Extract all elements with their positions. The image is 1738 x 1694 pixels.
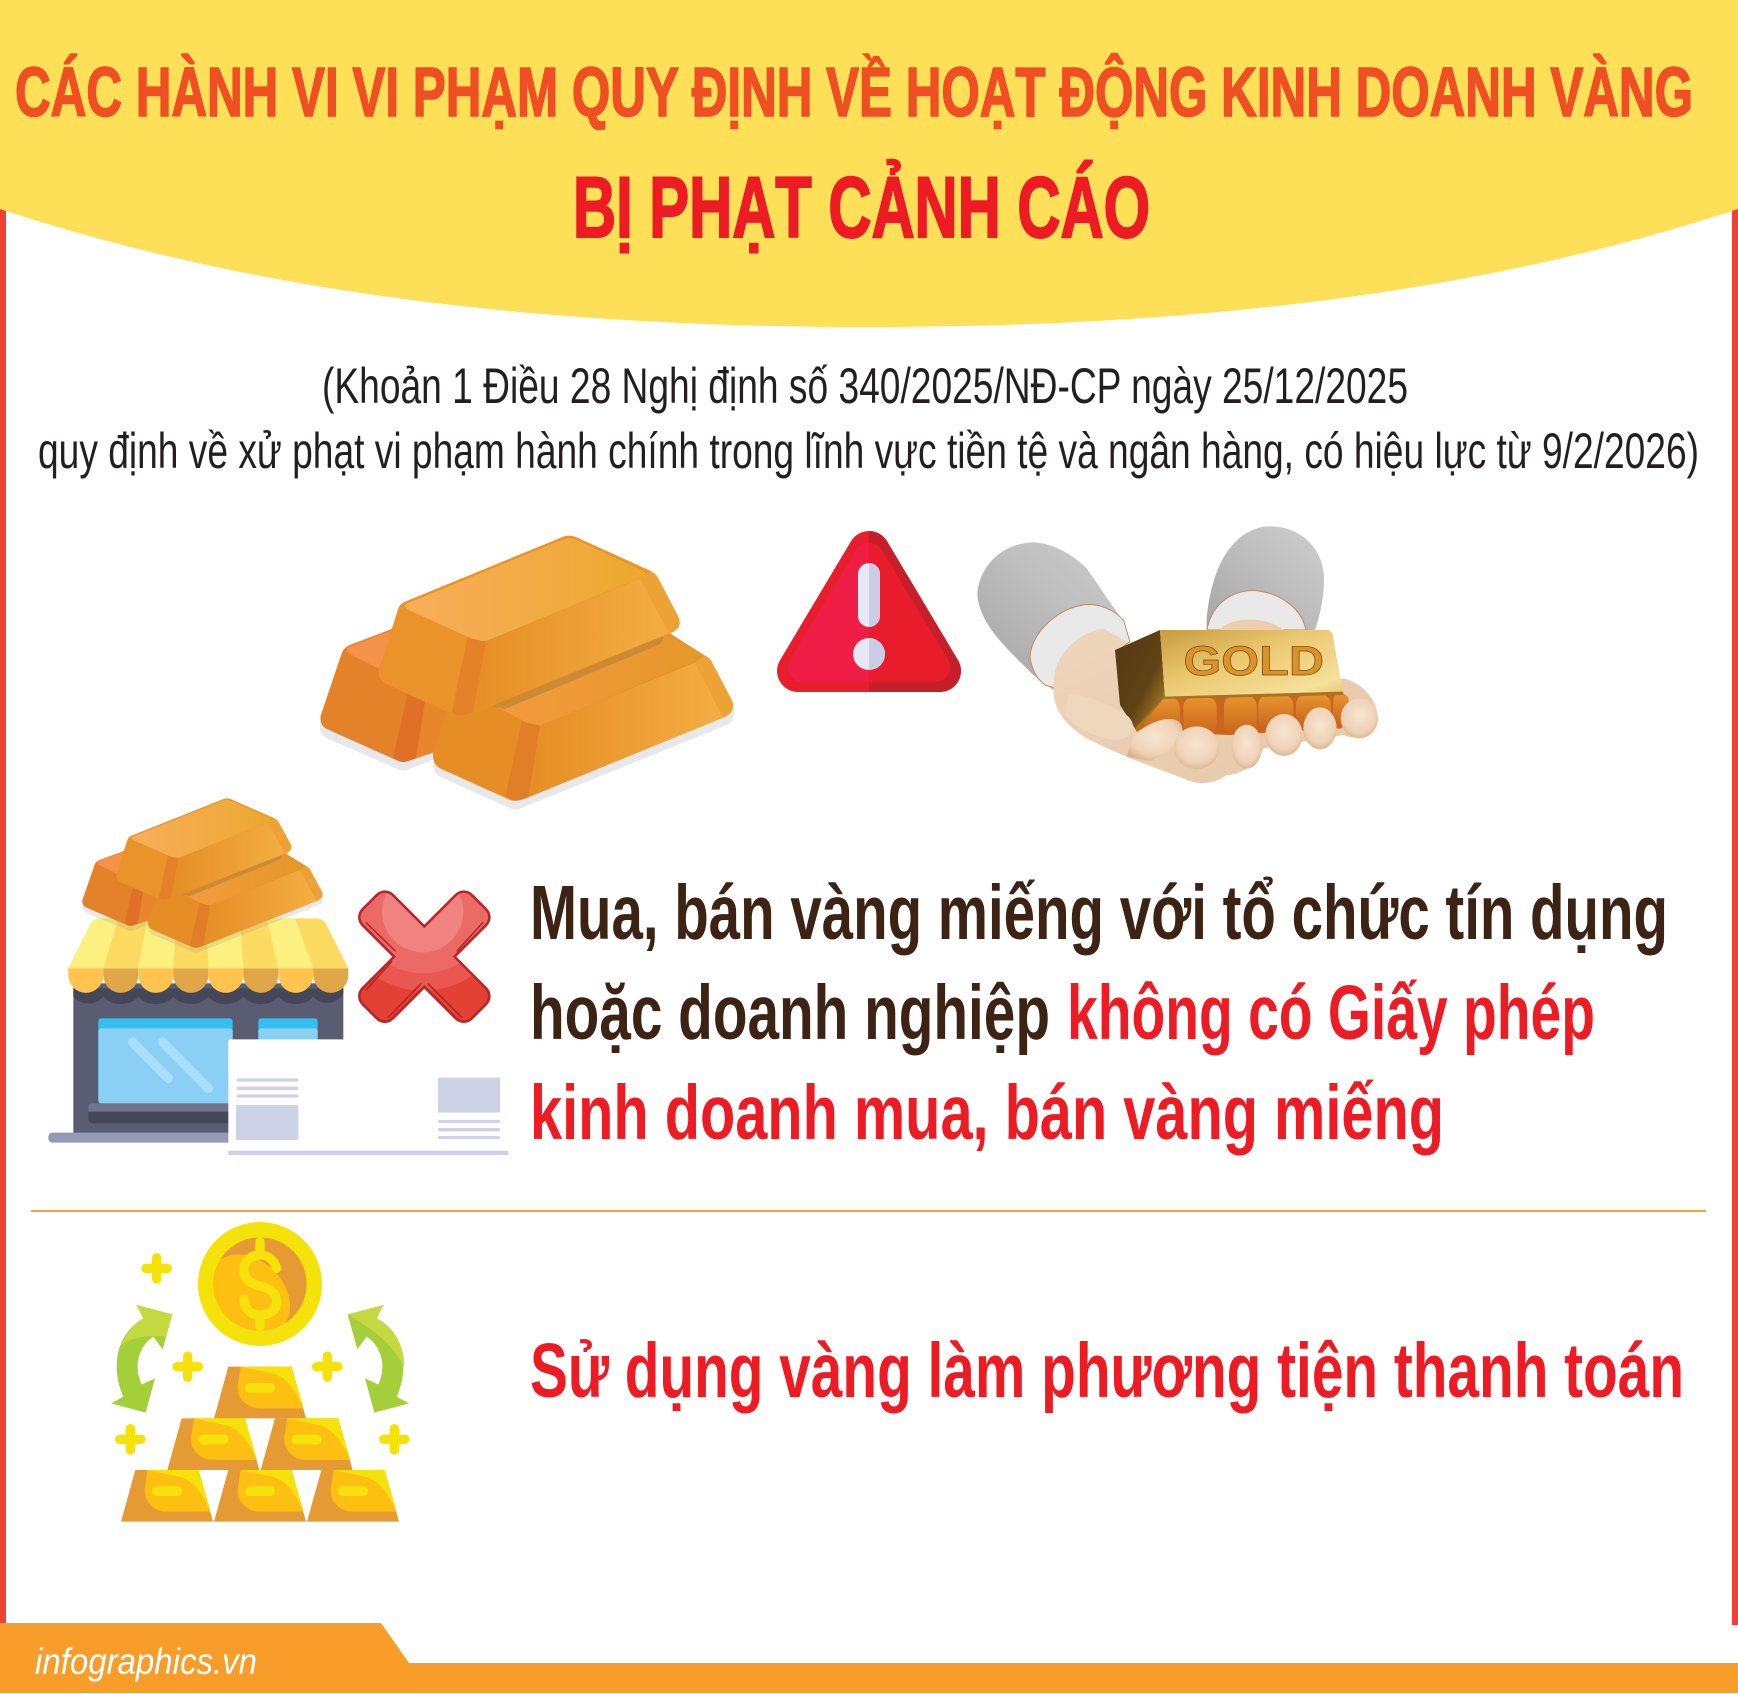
document baseline: [228, 1151, 508, 1155]
icon: gold shop with cross: [48, 798, 511, 1155]
plus signs: [120, 1258, 405, 1450]
header banner: [0, 0, 1738, 327]
gold bar label: GOLD: [1183, 637, 1324, 684]
violation 1 text: [530, 870, 1668, 1156]
window sill: [88, 1103, 232, 1113]
wrist behind bar: [1220, 620, 1283, 630]
gold bar left side: [1115, 630, 1165, 728]
side border: left: [0, 205, 6, 1625]
shop wall: [73, 983, 343, 1133]
gold bar lower edge: [1135, 692, 1343, 732]
side border: right: [1732, 205, 1738, 1625]
left cuff: [1030, 604, 1130, 688]
legal reference subtitle: [38, 358, 1699, 479]
document right block: [438, 1078, 500, 1139]
white document panel: [228, 1039, 510, 1151]
icon: hands holding gold bar: [977, 526, 1378, 783]
ground line: [48, 1133, 235, 1143]
icon: large gold bars: [320, 536, 734, 810]
gold bar front: [1160, 630, 1343, 697]
hand palm: [1053, 628, 1377, 783]
title: [15, 52, 1693, 256]
icon: gold payment: [111, 1222, 409, 1522]
gold bars on shop: [82, 798, 323, 953]
coin: [198, 1222, 322, 1346]
title line 2: BỊ PHẠT CẢNH CÁO: [573, 160, 1150, 256]
left sleeve: [977, 542, 1130, 690]
fingers: [1127, 698, 1378, 769]
gold bar pyramid: [121, 1367, 399, 1522]
icon: warning triangle: [798, 552, 940, 671]
icon: red cross: [358, 890, 491, 1023]
thumb: [1065, 695, 1133, 740]
footer brand: infographics.vn: [35, 1641, 257, 1682]
large window: [98, 1018, 233, 1103]
right cuff: [1207, 590, 1306, 630]
finger shadows on gold bar: [1143, 694, 1349, 734]
awning shadow: [73, 988, 343, 1004]
gold bar underside: [1120, 692, 1349, 735]
violation 1 line 3: kinh doanh mua, bán vàng miếng: [530, 1070, 1444, 1156]
right sleeve: [1207, 526, 1324, 630]
divider: [31, 1210, 1706, 1212]
right arrow: [348, 1305, 409, 1413]
awning stripes: [68, 918, 348, 968]
violation 1 line 2 dark: hoặc doanh nghiệp: [530, 970, 1050, 1056]
footer bar: [0, 1623, 1738, 1693]
awning scallops: [68, 968, 348, 993]
left arrow: [111, 1305, 172, 1413]
small window: [258, 1018, 318, 1045]
document left lines: [236, 1078, 298, 1140]
